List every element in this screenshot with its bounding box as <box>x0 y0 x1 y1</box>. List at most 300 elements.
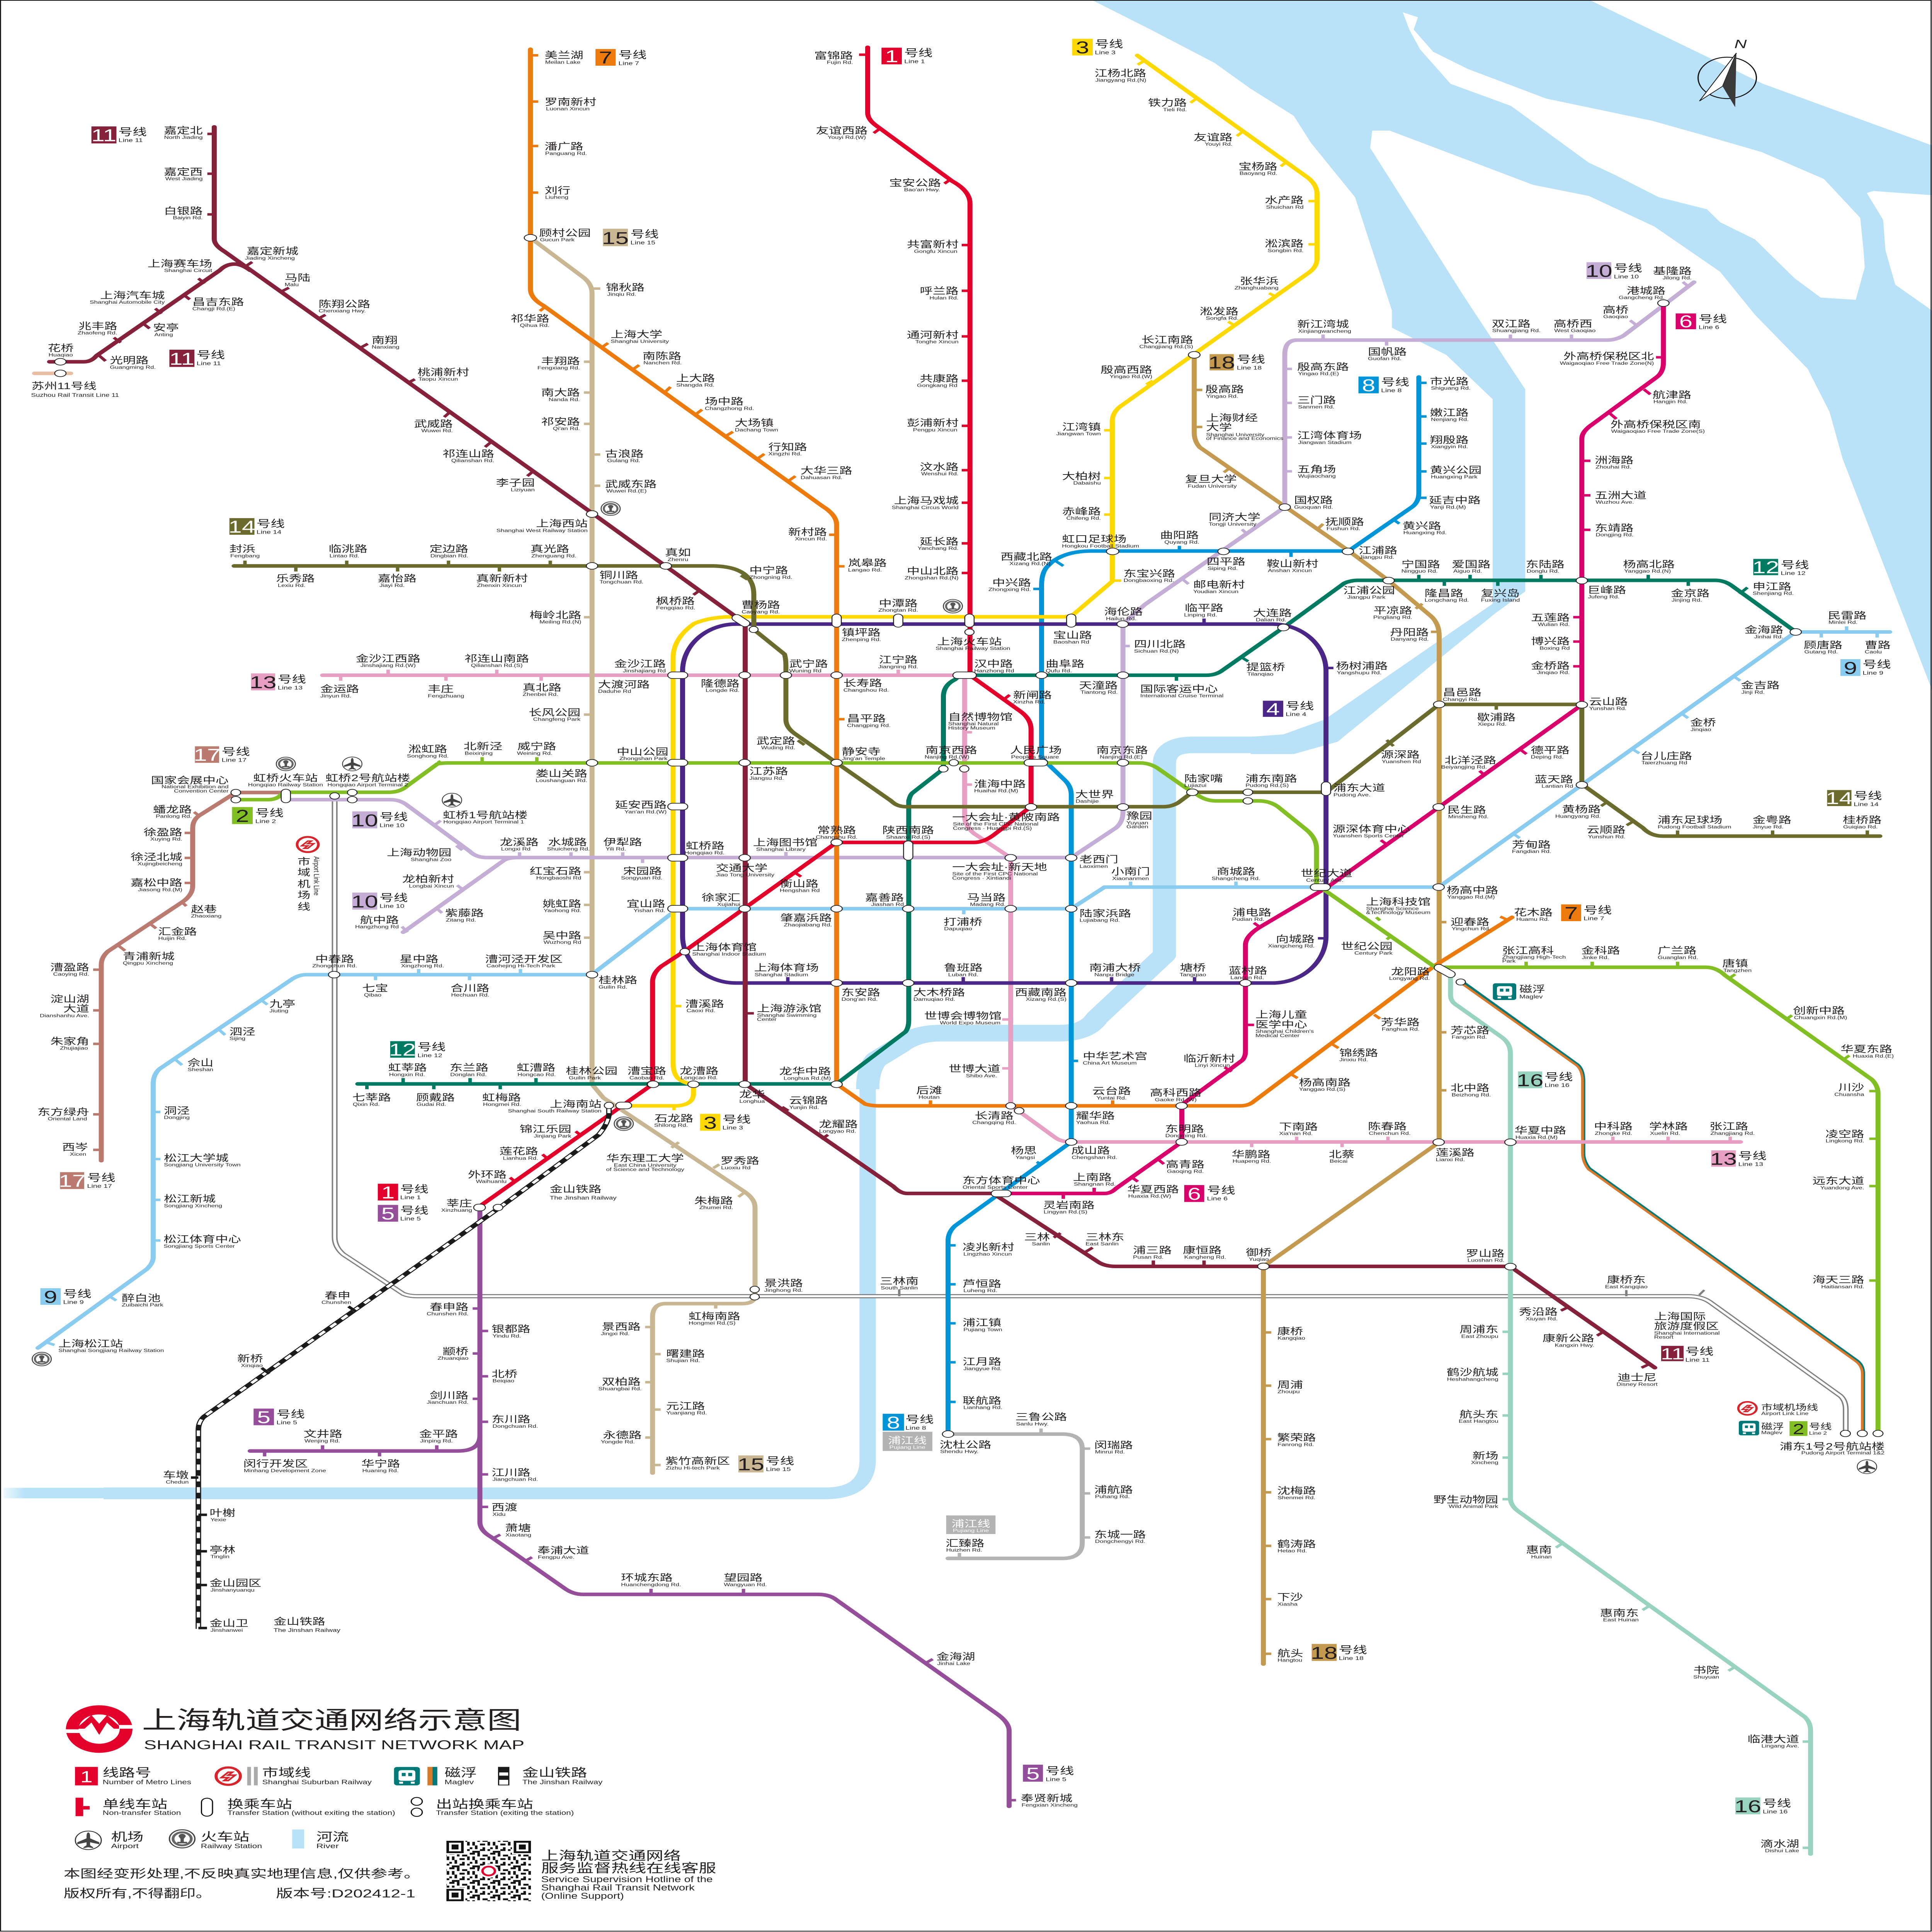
station labels: Line 6: Shanghai Children's <box>1255 1029 1314 1034</box>
station labels: Line 17: Caoying Rd. <box>53 972 89 977</box>
station labels: Line 3: 石龙路 <box>655 1114 693 1124</box>
station labels: Line 3: 江湾镇 <box>1062 422 1101 432</box>
station labels: Line 7: 长寿路 <box>844 679 882 689</box>
station labels: Line 4: 杨树浦路 <box>1336 661 1388 671</box>
station labels: Line 7: 静安寺 <box>842 747 881 757</box>
station labels: Line 3: Baoshan Rd <box>1053 640 1089 645</box>
station labels: Line 6: Medical Center <box>1255 1033 1299 1038</box>
station labels: Line 11: Shanghai Swimming <box>757 1013 817 1018</box>
icon: railway station Songjiang <box>32 1352 51 1366</box>
Line 15 ticks <box>584 289 744 1465</box>
station labels: Line 9: 商城路 <box>1216 867 1255 877</box>
station labels: Line 18: Shenmei Rd. <box>1277 1495 1315 1500</box>
badge Line 11 middle: Line 11 <box>197 361 221 366</box>
station labels: Line 7: 场中路 <box>705 397 743 407</box>
station labels: Line 1: 友谊西路 <box>816 126 868 136</box>
station labels: Line 13: 北蔡 <box>1329 1150 1355 1160</box>
Line 11 ticks <box>99 134 1648 1368</box>
station labels: Line 5 and Jinshan Railway: 文井路 <box>304 1429 342 1439</box>
map icons <box>32 37 1877 1474</box>
station labels: Line 10: 三门路 <box>1297 395 1336 405</box>
icon: railway station Hongqiao <box>276 757 295 771</box>
badge Line 14 east: 号线 <box>1854 790 1882 801</box>
station labels: Line 18: Yingchun Rd. <box>1452 927 1491 932</box>
station labels: Line 11: 御桥 <box>1246 1248 1272 1258</box>
service hotline text: Service Supervision Hotline of the <box>541 1874 713 1884</box>
station labels: Line 14: 真新新村 <box>476 574 528 584</box>
station labels: Line 12: Hongcao Rd. <box>517 1072 556 1077</box>
station labels: Line 5 and Jinshan Railway: The Jinshan Railway <box>274 1628 341 1633</box>
station labels: Line 4: 鲁班路 <box>944 963 983 973</box>
station labels: Line 12: International Cruise Terminal <box>1140 694 1223 699</box>
station labels: Line 15: 双柏路 <box>602 1377 641 1387</box>
station labels: Line 13: Shanghai Natural <box>948 721 999 727</box>
badge Line 17 bottom: 号线 <box>87 1172 116 1184</box>
river: Yangtze and upper Huangpu <box>1092 0 1932 754</box>
station labels: Line 8: Huangxing Park <box>1431 474 1478 480</box>
station labels: Line 14: Lexiu Rd. <box>278 583 305 588</box>
station labels: Line 12: Hongmei Rd. <box>483 1102 521 1107</box>
station labels: Line 8: 浦航路 <box>1094 1485 1133 1495</box>
station labels: Line 5 and Jinshan Railway: Dongchuan Rd. <box>493 1424 538 1429</box>
station labels: Line 12: Qufu Rd. <box>1046 668 1072 673</box>
service hotline text: 服务监督热线在线客服 <box>541 1861 716 1875</box>
station labels: Line 17: 淀山湖 <box>50 994 89 1004</box>
Line 4 ticks <box>788 619 1333 983</box>
station labels: Line 10: Site of the First CPC National <box>952 872 1038 877</box>
station labels: Line 13: Huaxia Rd.(M) <box>1515 1135 1558 1140</box>
station labels: Line 11: 嘉定北 <box>164 126 203 136</box>
station labels: Line 13: Chengshan Rd. <box>1072 1155 1117 1160</box>
station labels: Line 9: 洞泾 <box>164 1106 190 1116</box>
station labels: Line 5 and Jinshan Railway: 望园路 <box>724 1573 763 1583</box>
badge Line 15 bottom: Line 15 <box>766 1466 791 1472</box>
badge Line 10 east <box>1585 261 1642 281</box>
station labels: Line 5 and Jinshan Railway: Yindu Rd. <box>493 1334 521 1339</box>
station labels: Line 10: West Gaoqiao <box>1554 328 1595 333</box>
station labels: Line 15: 吴中路 <box>543 930 581 941</box>
station labels: Line 1: 新闸路 <box>1013 690 1052 701</box>
station labels: Line 9: Minlei Rd. <box>1828 620 1858 625</box>
badge Line 1 top: Line 1 <box>904 58 925 65</box>
badge Line 18 north: 18 <box>1208 353 1235 372</box>
station labels: Line 12: Donglu Rd. <box>1527 569 1560 574</box>
station labels: Line 1: Xujiahui <box>717 902 740 907</box>
badge Line 18 north: Line 18 <box>1237 365 1262 371</box>
station labels: Line 6: Waigaoqiao Free Trade Zone(S) <box>1611 429 1705 434</box>
station labels: Line 11: West Jiading <box>165 177 203 182</box>
station labels: Line 17: 赵巷 <box>191 904 217 915</box>
badge Line 3 north <box>1072 38 1123 57</box>
badge Line 14 west: Line 14 <box>257 529 281 535</box>
station labels: Line 11: 白银路 <box>164 206 203 216</box>
icon: compass <box>1698 37 1757 107</box>
station labels: Line 12: 申江路 <box>1753 582 1791 592</box>
station labels: Line 14: Yunshun Rd. <box>1588 834 1626 840</box>
badge Line 1 Xinzhuang: 号线 <box>400 1184 429 1195</box>
station labels: Line 16 and Airport Link Line: 野生动物园 <box>1434 1495 1498 1505</box>
station labels: Line 17: 汇金路 <box>158 927 197 937</box>
map notes: Pudong airport key: Airport Link Line <box>1761 1411 1809 1416</box>
station labels: Line 8: 东方体育中心 <box>963 1175 1040 1186</box>
station labels: Line 6: Dongjing Rd. <box>1595 532 1633 537</box>
station labels: Line 2: 金科路 <box>1581 946 1620 956</box>
station labels: Line 1: 一大会址·黄陂南路 <box>952 812 1060 823</box>
station labels: Line 3: Shuichan Rd <box>1266 205 1304 210</box>
station labels: Line 12: Qixin Rd. <box>353 1102 380 1107</box>
station labels: Line 15: 华东理工大学 <box>606 1153 684 1163</box>
station labels: Line 8: Pujiang Town <box>963 1327 1002 1332</box>
station labels: Line 9: Sijing <box>230 1036 245 1041</box>
badge Line 7 top: Line 7 <box>618 60 639 66</box>
station labels: Line 8: Dongchengyi Rd. <box>1095 1539 1145 1544</box>
station labels: Line 9: 松江体育中心 <box>163 1235 241 1245</box>
station labels: Line 11: 康恒路 <box>1183 1245 1222 1255</box>
badge Line 3 south: 3 <box>704 1113 717 1133</box>
badge Line 5 Xinzhuang: 号线 <box>400 1204 429 1216</box>
badge Line 13 east: 13 <box>1710 1149 1737 1168</box>
badge Line 11 top: Line 11 <box>119 137 143 143</box>
badge Line 4: 号线 <box>1286 700 1314 712</box>
station labels: Line 2: 北新泾 <box>464 742 502 752</box>
station labels: Line 10: 四平路 <box>1207 557 1245 567</box>
station labels: Line 10: Siping Rd. <box>1208 566 1238 571</box>
badge Line 13 west: 号线 <box>278 673 306 685</box>
station labels: Line 14: Lantian Rd <box>1541 784 1573 789</box>
station labels: Line 8: 黄兴路 <box>1402 521 1441 531</box>
Line 2 ticks <box>438 757 1878 1281</box>
station labels: Line 14: 临洮路 <box>328 544 367 554</box>
badge Line 2 west: Line 2 <box>255 818 276 824</box>
station labels: Line 2: 南京西路 <box>925 745 977 755</box>
map notes: Airport Link Line vertical caption: 机 <box>298 879 310 889</box>
station labels: Line 15: Fengxiang Rd. <box>537 366 580 371</box>
Line 2 route <box>236 763 1878 1434</box>
station labels: Line 10: Jilong Rd. <box>1663 276 1692 281</box>
station labels: Line 13: Longde Rd. <box>706 688 740 693</box>
station labels: Line 6: Boxing Rd <box>1539 646 1570 651</box>
station labels: Line 10: Shanghai Library <box>756 847 806 852</box>
badge Line 1 Xinzhuang: Line 1 <box>400 1194 421 1201</box>
station labels: Line 10: Wujiaochang <box>1298 474 1336 479</box>
station labels: Line 10: Youdian Xincun <box>1193 589 1238 594</box>
station labels: Line 9: 台儿庄路 <box>1641 751 1692 761</box>
station labels: Line 9: 曹路 <box>1865 640 1891 650</box>
service hotline text: Shanghai Rail Transit Network <box>541 1883 695 1892</box>
station labels: Line 7: Yaohua Rd. <box>1076 1120 1110 1125</box>
station labels: Line 8: Zhongxing Rd. <box>988 587 1031 592</box>
station labels: Line 9: 上海松江站 <box>58 1339 123 1349</box>
station labels: Line 7: Nanchen Rd. <box>643 361 682 366</box>
Line 10 ticks <box>402 282 1689 932</box>
station labels: Line 3: Yan'an Rd.(W) <box>624 810 667 815</box>
station labels: Line 14: 封浜 <box>230 544 255 554</box>
badge Line 12 west: Line 12 <box>417 1053 442 1058</box>
icon: compass: N <box>1734 37 1747 51</box>
station labels: Line 6: 灵岩南路 <box>1043 1200 1095 1211</box>
station labels: Line 7: 东安路 <box>842 988 880 998</box>
station labels: Line 11: Qilianshan Rd. <box>451 458 494 463</box>
station labels: Line 3: 赤峰路 <box>1062 507 1101 517</box>
station labels: Line 2: Century Park <box>1354 951 1393 956</box>
station labels: Line 13: Zhongke Rd. <box>1595 1131 1632 1136</box>
badge Line 5 branch <box>253 1408 305 1427</box>
logo <box>66 1710 133 1748</box>
station labels: Line 10: Yuyuan <box>1126 820 1148 826</box>
station labels: Line 10: 一大会址·新天地 <box>952 862 1047 872</box>
station labels: Line 9 <box>58 610 1891 1353</box>
station labels: Line 11: 龙耀路 <box>819 1119 858 1129</box>
station labels: Line 5 and Jinshan Railway: Beiqiao <box>493 1379 514 1384</box>
station labels: Line 5 and Jinshan Railway: Chunshen <box>321 1300 351 1305</box>
badge Line 3 north: 3 <box>1076 38 1089 57</box>
station labels: Line 11: Kangxin Hwy. <box>1554 1343 1594 1348</box>
station labels: Line 3: 长江南路 <box>1141 335 1193 345</box>
station labels: Line 5 and Jinshan Railway: Xidu <box>493 1512 506 1517</box>
station labels: Line 9: 七宝 <box>362 983 388 993</box>
station labels: Line 13: 莲溪路 <box>1436 1148 1475 1158</box>
legend: Jinshan Railway: 金山铁路 <box>522 1766 587 1779</box>
station labels: Line 11: 迪士尼 <box>1617 1372 1656 1383</box>
station labels: Line 12: Yanggao Rd.(N) <box>1624 569 1671 574</box>
legend: airport: Airport <box>111 1843 139 1850</box>
badge Line 12 west <box>389 1040 446 1060</box>
badge Line 9 west: 9 <box>44 1287 57 1306</box>
Line 13 ticks <box>341 670 1730 1147</box>
title: 上海轨道交通网络示意图 <box>142 1707 522 1734</box>
station labels: Line 10: Hongqiao Airport Terminal 1 <box>443 820 524 825</box>
map notes: Airport Link Line vertical caption: 域 <box>298 867 310 878</box>
station labels: Line 11: 康新公路 <box>1543 1333 1594 1344</box>
station labels: Line 9: Xingzhong Rd. <box>401 964 444 969</box>
station labels: Line 17: 徐盈路 <box>143 827 182 838</box>
station labels: Line 4: Tangqiao <box>1180 973 1206 978</box>
station labels: Line 8: Puhang Rd. <box>1095 1494 1129 1500</box>
station labels: Line 11: 兆丰路 <box>78 321 117 332</box>
station labels: Line 10: 紫藤路 <box>445 908 484 918</box>
station labels: Line 9: 金吉路 <box>1741 680 1780 690</box>
station labels: Line 10: Guoquan Rd. <box>1294 505 1333 510</box>
disclaimer text: 本图经变形处理,不反映真实地理信息,仅供参考。 <box>64 1867 420 1880</box>
station labels: Line 12: Jiangpu Park <box>1347 595 1386 600</box>
station labels: Line 7 <box>510 50 1553 1125</box>
badge Line 6 south: 号线 <box>1207 1184 1235 1196</box>
badge Line 9 west <box>40 1287 92 1306</box>
badge Line 4: Line 4 <box>1286 711 1306 717</box>
station labels: Line 5 and Jinshan Railway: 奉浦大道 <box>537 1546 589 1556</box>
station labels: Line 8: 三鲁公路 <box>1015 1412 1067 1422</box>
Line 10 branch <box>403 857 517 932</box>
station labels: Line 17: Qingpu Xincheng <box>123 961 173 966</box>
station labels: Line 18: Pingliang Rd. <box>1373 615 1412 620</box>
station labels: Line 2: Beixinjing <box>465 751 493 756</box>
station labels: Line 18: Fanrong Rd. <box>1277 1442 1314 1447</box>
legend: maglev <box>394 1766 477 1786</box>
badge Line 5 branch: Line 5 <box>277 1420 297 1426</box>
station labels: Line 12: Damuqiao Rd. <box>913 997 955 1002</box>
station labels: Line 10: 航中路 <box>360 915 399 925</box>
Pujiang Line route <box>948 1434 1082 1558</box>
station labels: Line 1: 上海马戏城 <box>894 496 959 506</box>
station labels: Line 11: Chenxiang Hwy. <box>319 309 366 314</box>
badge Line 3 south: Line 3 <box>723 1125 743 1131</box>
station labels: Line 12: 嘉善路 <box>865 893 904 903</box>
station labels: Line 9: Sheshan <box>187 1067 213 1072</box>
station labels: Line 18: 上海财经 <box>1206 413 1258 423</box>
station labels: Line 15: 铜川路 <box>599 570 638 580</box>
badge Line 17 top: Line 17 <box>222 757 247 763</box>
station labels: Line 2: Century Ave. <box>1306 878 1344 883</box>
station labels: Line 8: Huizhen Rd. <box>946 1548 982 1553</box>
station labels: Line 6: 博兴路 <box>1531 636 1570 646</box>
station labels: Line 7: Yanggao Rd.(S) <box>1299 1087 1345 1092</box>
station labels: Line 13: History Museum <box>948 726 995 731</box>
station labels: Line 10: 龙溪路 <box>500 837 539 847</box>
Line 6 route <box>1001 303 1663 1194</box>
station labels: Line 5 and Jinshan Railway: Huaning Rd. <box>362 1468 399 1473</box>
station labels: Line 9: Jinqiao <box>1690 727 1711 732</box>
badge Line 2 east: 2 <box>1793 1421 1804 1437</box>
station labels: Line 8: 西藏南路 <box>1015 988 1066 998</box>
station labels: Line 3: 漕溪路 <box>685 999 724 1009</box>
station labels: Line 12 <box>352 559 1794 1107</box>
badge Line 5 branch: 5 <box>257 1408 270 1427</box>
station labels: Line 11: Changji Rd.(E) <box>192 306 235 312</box>
badge Line 2 east: 号线 <box>1809 1422 1832 1431</box>
station labels: Line 9: 漕河泾开发区 <box>485 954 563 964</box>
badge Line 10 west lower: 10 <box>351 892 378 911</box>
station labels: Line 1: Lianhua Rd. <box>503 1156 538 1161</box>
station labels: Line 1: Gongkang Rd <box>917 383 957 388</box>
station labels: Line 3: Jiangyang Rd.(N) <box>1095 78 1146 83</box>
station labels: Line 4: Xiangcheng Rd. <box>1268 944 1315 949</box>
station labels: Line 10: 天潼路 <box>1079 680 1118 691</box>
station labels: Line 8: Yanji Rd.(M) <box>1430 505 1466 510</box>
badge Line 5 south: 5 <box>1026 1764 1040 1783</box>
station labels: Line 13: Chenchun Rd. <box>1369 1131 1411 1136</box>
station labels: Line 11: Fengqiao Rd. <box>656 605 696 611</box>
station labels: Line 1: Shanghai South Railway Station <box>508 1109 602 1114</box>
station labels: Line 13 <box>320 653 1755 1164</box>
station labels: Line 11: 枫桥路 <box>656 596 695 606</box>
station labels: Line 18: 芳芯路 <box>1451 1026 1489 1036</box>
station labels: Line 15: Changfeng Park <box>533 717 581 722</box>
badge Line 13 west <box>250 673 306 692</box>
station labels: Line 1: 汶水路 <box>920 462 959 472</box>
icon: suburban railway logo east <box>1738 1402 1757 1415</box>
station labels: Line 5 and Jinshan Railway: 剑川路 <box>430 1391 468 1401</box>
station labels: Line 16 and Airport Link Line: 滴水湖 <box>1760 1839 1799 1849</box>
badge Line 5 south <box>1023 1764 1074 1783</box>
station labels: Line 2: Haitiansan Rd. <box>1821 1284 1864 1289</box>
station labels: Line 2: 世纪大道 <box>1301 869 1352 879</box>
station labels: Line 13: 世博大道 <box>949 1064 1000 1074</box>
station labels: Line 3: Shilong Rd. <box>654 1123 688 1128</box>
station labels: Line 14: 大世界 <box>1075 789 1114 800</box>
station labels: Line 17: 徐泾北城 <box>131 852 182 862</box>
station labels: Line 9: 打浦桥 <box>944 917 982 927</box>
badge Line 17 top: 号线 <box>222 746 250 757</box>
river island: east <box>1867 191 1932 311</box>
station labels: Line 7: Xincun Rd. <box>795 537 827 542</box>
station labels: Line 3: Songfa Rd. <box>1206 316 1238 321</box>
station labels: Line 8: Anshan Xincun <box>1268 568 1312 573</box>
station labels: Line 10: Jiao Tong University <box>716 872 775 878</box>
station labels: Line 9: 九亭 <box>269 999 295 1009</box>
legend: railway station <box>170 1830 262 1850</box>
station labels: Line 2: 虹桥2号航站楼 <box>325 773 410 783</box>
station labels: Line 16 and Airport Link Line: East Huinan <box>1603 1617 1639 1622</box>
station labels: Line 7: 花木路 <box>1514 908 1553 918</box>
station labels: Line 11: Liziyuan <box>511 488 535 493</box>
Line 9 ticks <box>48 626 1877 1345</box>
station labels: Line 8: Luheng Rd. <box>963 1288 997 1293</box>
station labels: Line 15: Shuangbai Rd. <box>599 1386 642 1391</box>
station labels: Line 3: 宝杨路 <box>1238 162 1277 172</box>
station labels: Line 5 and Jinshan Railway: 金山园区 <box>209 1578 261 1588</box>
station labels: Line 11: 上海西站 <box>536 519 588 529</box>
badge Line 18 south: 号线 <box>1339 1644 1367 1656</box>
station labels: Line 13: Qilianshan Rd.(S) <box>471 663 523 668</box>
station labels: Line 8: Sanlu Hwy. <box>1016 1422 1049 1427</box>
station labels: Line 9: Shanghai Songjiang Railway Station <box>58 1348 164 1353</box>
badge Line 6 north: 6 <box>1679 312 1692 331</box>
station labels: Line 7: 龙阳路 <box>1391 967 1430 977</box>
station labels: Line 12: 大连路 <box>1253 608 1292 618</box>
legend: transfer station exiting: 出站换乘车站 <box>436 1798 533 1811</box>
station labels: Line 14: 金粤路 <box>1753 815 1791 825</box>
station labels: Line 14: 浦东大道 <box>1333 783 1385 793</box>
station labels: Line 13: 隆德路 <box>701 679 740 689</box>
station labels: Line 16 and Airport Link Line: Huinan <box>1531 1554 1552 1560</box>
station labels: Line 15: Wuzhong Rd <box>544 940 581 945</box>
station labels: Line 13: 金沙江西路 <box>356 654 420 664</box>
station labels: Line 16 and Airport Link Line: Resort <box>1654 1335 1673 1340</box>
station labels: Line 18 <box>1185 384 1491 1663</box>
badge Line 10 west upper: 号线 <box>379 811 408 823</box>
station labels: Line 15: Jinqiu Rd. <box>607 292 636 297</box>
station labels: Line 11: North Jiading <box>164 135 203 140</box>
station labels: Line 13: Huapeng Rd. <box>1233 1159 1271 1164</box>
station labels: Line 1: Xinzha Rd. <box>1013 700 1045 705</box>
station labels: Line 11: 武威路 <box>414 419 453 429</box>
station labels: Line 4: 上海体育场 <box>754 963 819 973</box>
badge Line 8 north: 8 <box>1362 376 1375 395</box>
station labels: Line 17: Huijin Rd. <box>158 936 187 941</box>
station labels: Line 8: 汇臻路 <box>946 1538 985 1549</box>
badge Line 1 Xinzhuang: 1 <box>381 1183 395 1202</box>
station labels: Line 3: 张华浜 <box>1240 276 1279 286</box>
station labels: Line 5 and Jinshan Railway: 银都路 <box>492 1324 531 1334</box>
badge Line 16 south: Line 16 <box>1763 1809 1787 1815</box>
station labels: Line 1: Caobao Rd. <box>629 1076 664 1081</box>
station labels: Line 5 and Jinshan Railway: 华宁路 <box>361 1459 400 1469</box>
station labels: Line 8: Xiangyin Rd. <box>1431 444 1468 449</box>
station labels: Line 1: Shanghai Indoor Stadium <box>692 952 766 957</box>
station labels: Line 10: Garden <box>1126 825 1148 830</box>
legend: non-transfer station: 单线车站 <box>103 1798 167 1811</box>
station labels: Line 11: Hengshan Rd <box>780 888 820 893</box>
station labels: Line 8: 江浦路 <box>1359 546 1397 556</box>
station labels: Line 15: 祁安路 <box>541 417 580 427</box>
station labels: Line 15: Wuwei Rd.(E) <box>606 489 646 494</box>
station labels: Line 9: Gutang Rd. <box>1804 650 1838 655</box>
badge Line 17 top: 17 <box>194 745 220 765</box>
station labels: Line 9: 芳甸路 <box>1512 840 1551 850</box>
station labels: Line 7: 芳华路 <box>1381 1017 1420 1027</box>
station labels: Line 15: Nanda Rd. <box>549 397 580 402</box>
station labels: Line 14: 定边路 <box>430 544 468 554</box>
